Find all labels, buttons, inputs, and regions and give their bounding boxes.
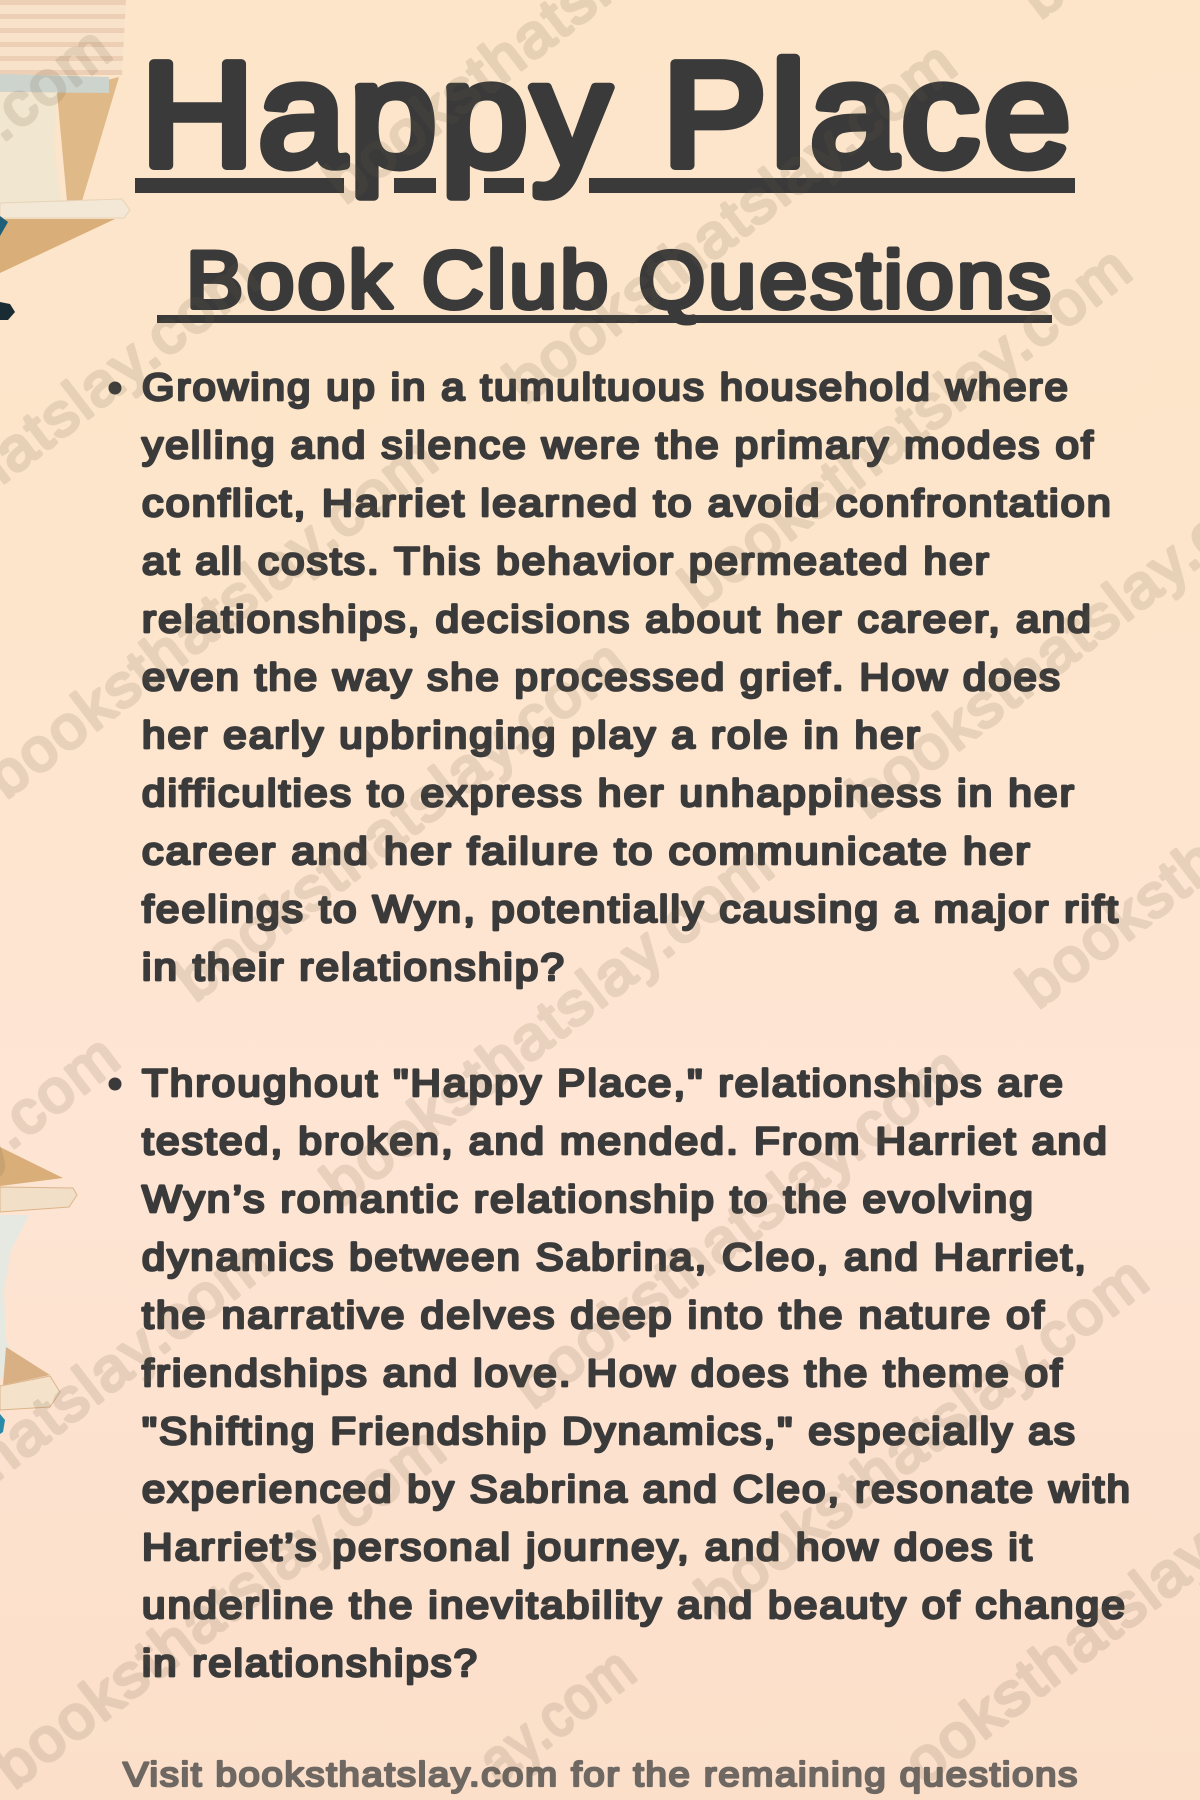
question 1 text: Growing up in a tumultuous household where: [142, 367, 1070, 409]
watermarks: booksthatslay.com: [162, 625, 639, 1013]
question 1 text: relationships, decisions about her career, and: [142, 599, 1093, 641]
question 1 text: [142, 367, 1120, 989]
question 2: [108, 1063, 1132, 1685]
question 2 text: underline the inevitability and beauty of change: [142, 1585, 1127, 1627]
watermarks: booksthatslay.com: [667, 232, 1144, 620]
question 2 text: Throughout "Happy Place," relationships are: [142, 1063, 1065, 1105]
question 2 text: Wyn’s romantic relationship to the evolving: [142, 1179, 1035, 1221]
watermarks: booksthatslay.com: [492, 27, 969, 415]
title underline: [135, 178, 1075, 193]
question 1 text: conflict, Harriet learned to avoid confrontation: [142, 483, 1113, 525]
question 1 text: her early upbringing play a role in her: [142, 715, 922, 757]
question 2 text: tested, broken, and mended. From Harriet and: [142, 1121, 1109, 1163]
subtitle: Book Club Questions: [186, 236, 1054, 326]
bullet 1: [108, 382, 122, 394]
question 1 text: difficulties to express her unhappiness in her: [142, 773, 1076, 815]
question 1 text: yelling and silence were the primary modes of: [142, 425, 1095, 467]
question 2 text: friendships and love. How does the theme of: [142, 1353, 1064, 1395]
watermarks: booksthatslay.com: [500, 1032, 977, 1420]
question 1 text: career and her failure to communicate her: [142, 831, 1032, 873]
question 1 text: even the way she processed grief. How does: [142, 657, 1062, 699]
title: Happy Place: [141, 32, 1075, 198]
question 1 text: feelings to Wyn, potentially causing a major rift: [142, 889, 1120, 931]
question 2 text: dynamics between Sabrina, Cleo, and Harriet,: [142, 1237, 1088, 1279]
subtitle underline: [157, 315, 1052, 323]
question 1: [108, 367, 1120, 989]
question 2 text: [142, 1063, 1132, 1685]
question 2 text: "Shifting Friendship Dynamics," especially as: [142, 1411, 1077, 1453]
question 2 text: experienced by Sabrina and Cleo, resonate with: [142, 1469, 1132, 1511]
watermarks: booksthatslay.com: [684, 1242, 1161, 1630]
footer note: Visit booksthatslay.com for the remaining questions: [123, 1756, 1079, 1794]
bullet 2: [108, 1078, 122, 1090]
question 2 text: the narrative delves deep into the nature of: [142, 1295, 1046, 1337]
question 1 text: at all costs. This behavior permeated her: [142, 541, 991, 583]
image: stack of books lower left: [0, 1147, 77, 1434]
watermarks: ay.com: [466, 1634, 648, 1795]
question 2 text: in relationships?: [142, 1643, 479, 1685]
question 2 text: Harriet’s personal journey, and how does it: [142, 1527, 1034, 1569]
image: stack of books top left: [0, 0, 130, 320]
question 1 text: in their relationship?: [142, 947, 566, 989]
watermarks: booksthatslay.com: [309, 829, 786, 1217]
